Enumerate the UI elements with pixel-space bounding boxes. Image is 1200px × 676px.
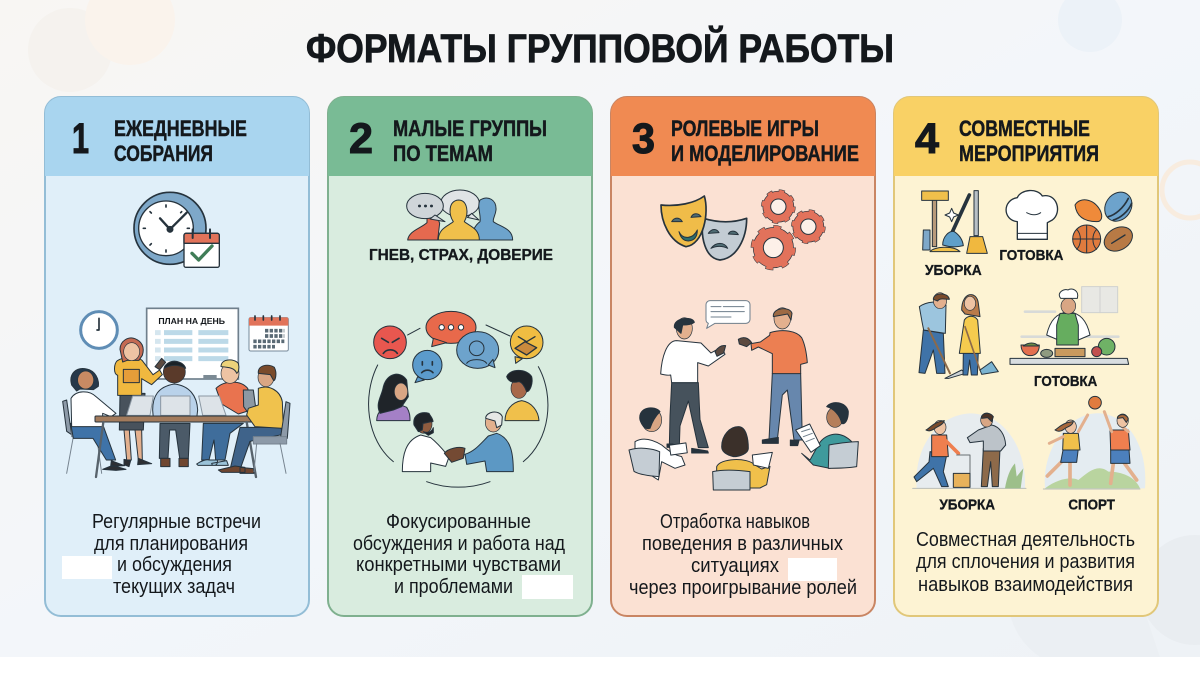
title: ФОРМАТЫ ГРУППОВОЙ РАБОТЫ (306, 25, 894, 71)
text block 3: Отработка навыков (660, 511, 810, 533)
number 4: 4 (915, 115, 939, 163)
label: cleaning 2: УБОРКА (939, 496, 995, 513)
number 1: 1 (72, 115, 89, 163)
heading 2: ПО ТЕМАМ (393, 141, 493, 166)
heading 4 (959, 116, 1099, 166)
label: emotions: ГНЕВ, СТРАХ, ДОВЕРИЕ (369, 247, 553, 264)
joint cleanup scene (913, 413, 1026, 488)
text block 3: через проигрывание ролей (629, 577, 857, 599)
panel: role play (611, 97, 875, 616)
text block 4: навыков взаимодействия (918, 574, 1133, 596)
text block 3: ситуациях (691, 555, 779, 577)
text block 1: и обсуждения (117, 554, 232, 576)
icon: clock with calendar (134, 192, 219, 267)
heading 4: МЕРОПРИЯТИЯ (959, 141, 1099, 166)
person: seated left (629, 408, 687, 480)
illustrations card 2 (369, 190, 553, 487)
heading 1 (114, 116, 247, 166)
label: cleaning: УБОРКА (925, 262, 982, 279)
text block 2: обсуждения и работа над (353, 533, 565, 555)
whiteboard: ПЛАН НА ДЕНЬ (158, 316, 225, 326)
person: man in white shirt (661, 318, 726, 453)
heading 3 (671, 116, 859, 166)
icon: cleaning tools (922, 191, 987, 253)
panel: joint activities (894, 97, 1158, 616)
text block 4 (916, 529, 1135, 596)
illustrations card 3 (629, 195, 858, 490)
panel: small groups (328, 97, 592, 616)
white patch 2 (522, 575, 573, 599)
text block 1: Регулярные встречи (92, 511, 261, 533)
person: seated centre (713, 427, 772, 490)
person: woman purple (377, 374, 410, 421)
label: cooking 1: ГОТОВКА (999, 247, 1063, 264)
person: seated woman left (63, 369, 126, 473)
heading 2: МАЛЫЕ ГРУППЫ (393, 116, 547, 141)
person: standing woman (114, 338, 166, 467)
label: cooking 2: ГОТОВКА (1034, 373, 1097, 390)
icon: sports balls (1073, 187, 1138, 256)
heading 1: СОБРАНИЯ (114, 141, 213, 166)
whiteboard (147, 308, 238, 379)
heading 2 (393, 116, 547, 166)
text block 3 (629, 511, 857, 599)
white patch 3 (788, 558, 837, 581)
person: man yellow (505, 370, 539, 421)
speech bubble (706, 301, 750, 328)
heading 3: И МОДЕЛИРОВАНИЕ (671, 141, 859, 166)
wall calendar (249, 316, 288, 351)
handshake (402, 412, 513, 472)
heading 4: СОВМЕСТНЫЕ (959, 116, 1090, 141)
text block 1: текущих задач (113, 576, 235, 598)
text block 4: Совместная деятельность (916, 529, 1135, 551)
icon: chef hat (1006, 191, 1058, 239)
emotion bubbles ring (369, 311, 548, 487)
heading 3: РОЛЕВЫЕ ИГРЫ (671, 116, 819, 141)
header band 2 (328, 97, 592, 176)
white patch 1 (62, 556, 112, 579)
number 3: 3 (632, 115, 655, 163)
text block 3: поведения в различных (642, 533, 843, 555)
text block 2: конкретными чувствами (356, 554, 561, 576)
text block 1 (92, 511, 261, 598)
number 2: 2 (349, 115, 373, 163)
label: sport: СПОРТ (1068, 496, 1115, 513)
text block 2: и проблемами (394, 576, 513, 598)
text block 2 (353, 511, 565, 598)
illustrations card 1 (63, 192, 290, 477)
icon: group with speech bubbles (407, 190, 513, 240)
heading 1: ЕЖЕДНЕВНЫЕ (114, 116, 247, 141)
person: right man (218, 365, 290, 473)
text block 4: для сплочения и развития (916, 551, 1135, 573)
people cleaning together (919, 293, 998, 378)
laptops and table (95, 396, 257, 477)
person: blond man (197, 360, 256, 465)
text block 1: для планирования (94, 533, 248, 555)
person: man in orange sweater (738, 308, 807, 446)
panel: daily meetings (45, 97, 309, 616)
header band 4 (894, 97, 1158, 176)
illustrations card 4 (913, 187, 1145, 513)
chef at kitchen counter (1010, 287, 1129, 364)
person: seated right (796, 403, 858, 468)
person: centre man (153, 361, 198, 467)
icon: gears (758, 195, 820, 263)
icon: theatre masks (661, 196, 747, 260)
sport scene (1043, 396, 1145, 489)
header band 1 (45, 97, 309, 176)
header band 3 (611, 97, 875, 176)
text block 2: Фокусированные (386, 511, 531, 533)
wall clock (81, 312, 117, 348)
